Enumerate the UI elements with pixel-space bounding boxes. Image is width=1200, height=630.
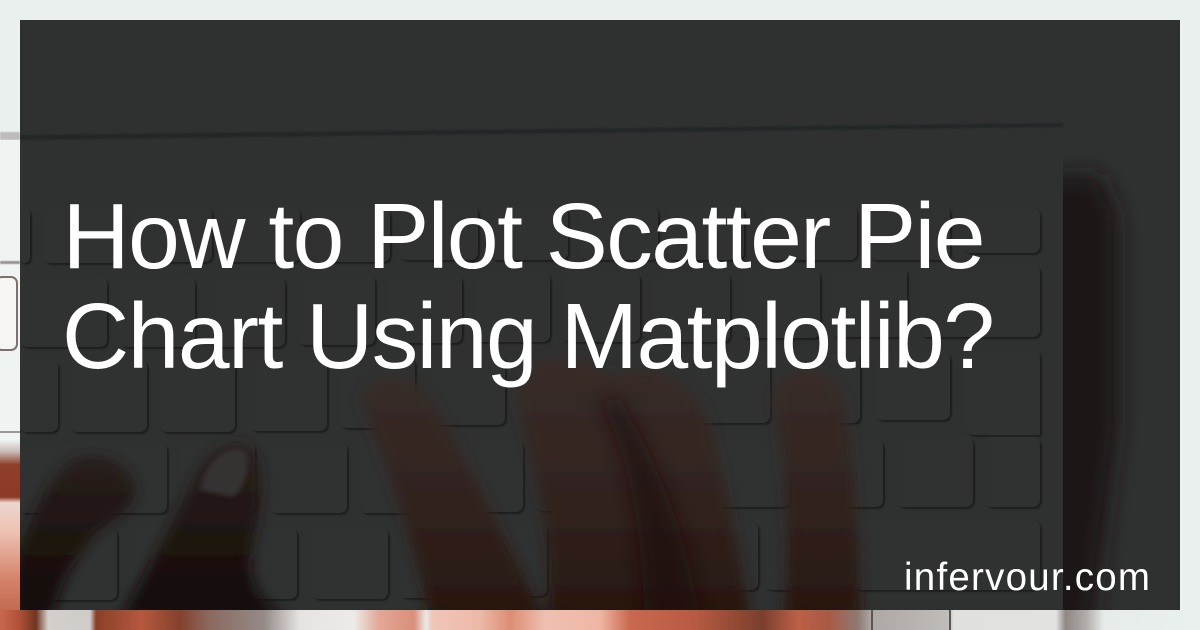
keyboard photo under overlay	[14, 123, 1118, 630]
fingernail	[200, 449, 248, 497]
hands	[14, 356, 860, 620]
title	[62, 184, 995, 388]
title: Chart Using Matplotlib?	[62, 284, 995, 388]
title: How to Plot Scatter Pie	[62, 184, 986, 288]
finger seams	[601, 398, 695, 606]
site name: infervour.com	[904, 556, 1150, 599]
